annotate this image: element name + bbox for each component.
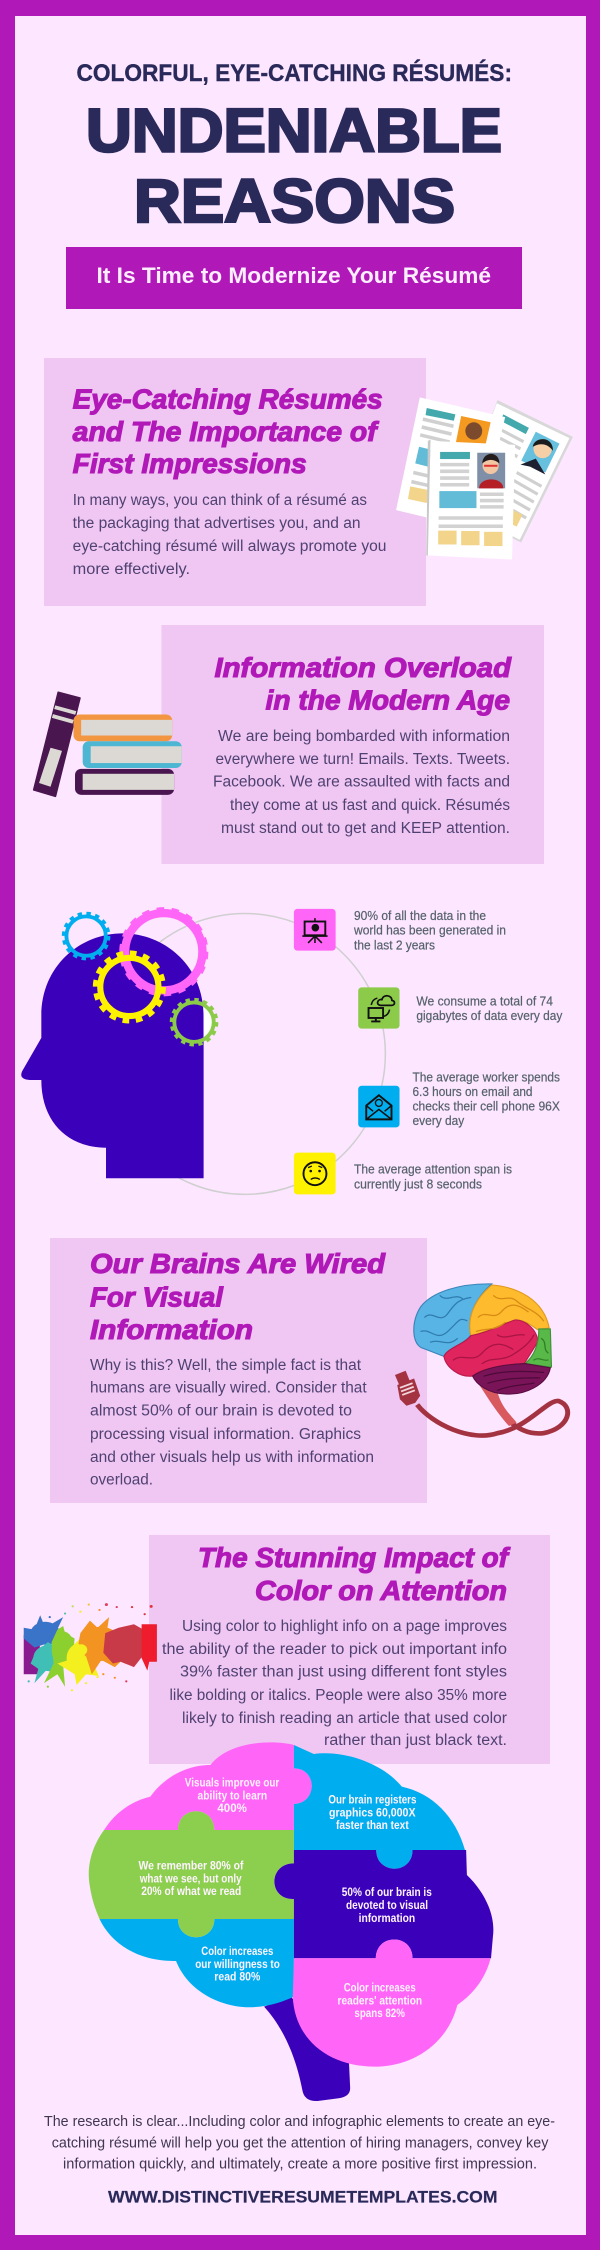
stat: attention span <box>354 1163 512 1191</box>
front sheet <box>426 440 515 559</box>
stat: email and phone: checks their cell phone 96X <box>412 1100 561 1114</box>
heading: and The Importance of <box>73 416 380 447</box>
lobe: yellow <box>470 1285 549 1336</box>
purple book <box>75 769 174 795</box>
body text: likely to finish reading an article that used color <box>182 1710 507 1727</box>
stat: gigabytes: gigabytes of data every day <box>416 1009 563 1023</box>
text: visual share: 50% of our brain is <box>342 1885 432 1899</box>
heading: Eye-Catching Résumés <box>73 384 383 414</box>
statistics text <box>353 909 563 1191</box>
left sheet <box>396 397 505 530</box>
body text: Using color to highlight info on a page improves <box>182 1618 507 1635</box>
illustration: colorful brain with USB cable <box>395 1284 568 1436</box>
stat: attention span: The average attention span is <box>354 1163 512 1177</box>
heading: Color on Attention <box>255 1575 507 1606</box>
heading: For Visual <box>90 1282 224 1312</box>
text: learning <box>185 1776 279 1815</box>
body text: like bolding or italics. People were also 35% more <box>170 1687 507 1704</box>
text: attention: readers' attention <box>338 1993 422 2007</box>
text: learning: 400% <box>217 1801 247 1815</box>
lobe: crimson <box>444 1320 538 1376</box>
orange paint <box>75 1617 124 1674</box>
illustration: rainbow paint splash <box>24 1603 157 1691</box>
piece: cyan upper right <box>294 1745 465 1869</box>
red paint <box>142 1624 157 1671</box>
text: memory <box>138 1858 244 1898</box>
headline line 1: UNDENIABLE <box>86 96 502 164</box>
text: memory: 20% of what we read <box>141 1884 241 1898</box>
yellow paint <box>57 1639 99 1685</box>
text: learning: Visuals improve our <box>185 1776 279 1790</box>
text: graphics speed: Our brain registers <box>328 1793 417 1807</box>
head silhouette <box>21 933 204 1178</box>
diagram: puzzle-piece brain <box>89 1742 493 2101</box>
banner text: It Is Time to Modernize Your Résumé <box>96 263 491 288</box>
body text: more effectively. <box>73 561 190 578</box>
stat: email and phone <box>412 1070 561 1128</box>
body text: must stand out to get and KEEP attention. <box>221 820 510 837</box>
purple and blue paint <box>24 1615 65 1674</box>
text: graphics speed: graphics 60,000X <box>329 1806 416 1820</box>
body text: overload. <box>90 1472 153 1488</box>
lobe: purple <box>473 1364 550 1394</box>
gear: yellow <box>95 953 163 1021</box>
heading <box>198 1542 511 1606</box>
body text: In many ways, you can think of a résumé as <box>73 492 367 509</box>
text: visual share: information <box>359 1911 415 1925</box>
heading: in the Modern Age <box>266 684 510 716</box>
icon: email envelope <box>358 1086 400 1127</box>
gear: cyan <box>64 914 108 958</box>
body text <box>73 492 386 578</box>
text: memory: what we see, but only <box>139 1871 242 1885</box>
text: attention <box>338 1980 422 2020</box>
closing paragraph: catching résumé will help you get the attention of hiring managers, convey key <box>52 2134 549 2151</box>
body text: We are being bombarded with information <box>218 728 510 745</box>
stat: email and phone: The average worker spends <box>412 1070 560 1084</box>
brain stem <box>264 1997 350 2101</box>
text: memory: We remember 80% of <box>138 1858 244 1872</box>
panel: eye-catching résumés <box>44 358 426 606</box>
text: willingness: Color increases <box>201 1944 273 1958</box>
stat: data generated <box>353 909 506 952</box>
panel: information overload <box>162 625 544 864</box>
stat: attention span: currently just 8 seconds <box>354 1177 482 1191</box>
cable <box>417 1401 568 1436</box>
body text: eye-catching résumé will always promote you <box>73 538 386 555</box>
right sheet <box>455 400 573 542</box>
title block <box>76 59 512 235</box>
stat: gigabytes: We consume a total of 74 <box>416 994 553 1008</box>
text: willingness: read 80% <box>214 1969 260 1983</box>
text: attention: Color increases <box>344 1980 416 1994</box>
gear: pink <box>122 910 206 994</box>
kicker line: COLORFUL, EYE-CATCHING RÉSUMÉS: <box>76 59 512 87</box>
panel: brains wired for visual information <box>50 1238 427 1503</box>
USB plug <box>395 1371 420 1406</box>
piece: magenta top <box>104 1742 312 1830</box>
body text: almost 50% of our brain is devoted to <box>90 1402 352 1420</box>
text: graphics speed <box>328 1793 417 1832</box>
piece: cyan lower left <box>100 1919 294 2007</box>
closing paragraph <box>44 2113 555 2172</box>
heading: The Stunning Impact of <box>198 1542 511 1573</box>
stat: gigabytes <box>416 994 563 1023</box>
heading <box>90 1248 386 1345</box>
heading: Information Overload <box>214 652 512 683</box>
banner <box>66 247 522 309</box>
body text: rather than just black text. <box>324 1732 507 1749</box>
stat: data generated: world has been generated in <box>353 924 506 938</box>
standing book <box>34 692 80 796</box>
body text: 39% faster than just using different font styles <box>180 1664 507 1680</box>
body text: Why is this? Well, the simple fact is that <box>90 1357 362 1374</box>
body text: everywhere we turn! Emails. Texts. Tweets. <box>216 751 510 768</box>
heading: Information <box>90 1314 253 1345</box>
closing paragraph: information quickly, and ultimately, create a more positive first impression. <box>63 2155 537 2172</box>
piece: green <box>89 1811 294 1937</box>
panel: impact of color <box>149 1535 550 1764</box>
gear: green <box>172 1000 216 1045</box>
text: willingness: our willingness to <box>195 1957 280 1971</box>
lobe: green <box>525 1329 551 1367</box>
text: learning: ability to learn <box>198 1788 267 1802</box>
heading: First Impressions <box>73 448 307 479</box>
text: visual share <box>342 1885 432 1925</box>
ring <box>104 913 385 1194</box>
body text: the packaging that advertises you, and an <box>73 515 360 532</box>
stat: data generated: the last 2 years <box>354 938 435 952</box>
text: graphics speed: faster than text <box>336 1818 409 1832</box>
website URL: WWW.DISTINCTIVERESUMETEMPLATES.COM <box>108 2188 497 2207</box>
text: visual share: devoted to visual <box>346 1898 428 1912</box>
illustration: three résumé sheets <box>396 397 573 559</box>
body text <box>90 1357 374 1488</box>
teal paint <box>31 1642 63 1683</box>
body text <box>162 1618 507 1749</box>
chart: statistics ring with head and gears <box>21 909 400 1194</box>
brain stem <box>475 1377 517 1426</box>
stat: email and phone: 6.3 hours on email and <box>412 1085 533 1099</box>
body text <box>213 728 510 837</box>
body text: they come at us fast and quick. Résumés <box>230 797 510 814</box>
body text: and other visuals help us with information <box>90 1449 374 1466</box>
body text: humans are visually wired. Consider that <box>90 1380 367 1396</box>
icon: confused face <box>294 1153 336 1194</box>
red-orange paint <box>103 1624 144 1667</box>
text: attention: spans 82% <box>354 2006 405 2020</box>
orange book <box>73 714 172 741</box>
body text: Facebook. We are assaulted with facts and <box>213 774 510 790</box>
piece: indigo <box>274 1850 493 1958</box>
icon: stack of books <box>34 692 182 796</box>
body text: processing visual information. Graphics <box>90 1426 361 1443</box>
stat: email and phone: every day <box>412 1114 465 1128</box>
closing paragraph: The research is clear...Including color and infographic elements to create an eye- <box>44 2113 555 2130</box>
piece: magenta bottom <box>293 1940 491 2067</box>
headline line 2: REASONS <box>134 167 455 235</box>
text: willingness <box>195 1944 280 1983</box>
brain folds <box>421 1296 548 1390</box>
stat: data generated: 90% of all the data in the <box>354 909 486 923</box>
heading: Our Brains Are Wired <box>90 1248 386 1279</box>
icon: cloud and computer <box>358 987 400 1029</box>
body text: the ability of the reader to pick out important info <box>162 1641 507 1658</box>
blue book <box>83 741 182 768</box>
icon: presentation board <box>294 909 336 951</box>
paint droplets <box>28 1603 153 1691</box>
heading <box>214 652 512 716</box>
lobe: blue <box>414 1284 492 1356</box>
green paint <box>44 1626 75 1687</box>
heading <box>73 384 383 479</box>
